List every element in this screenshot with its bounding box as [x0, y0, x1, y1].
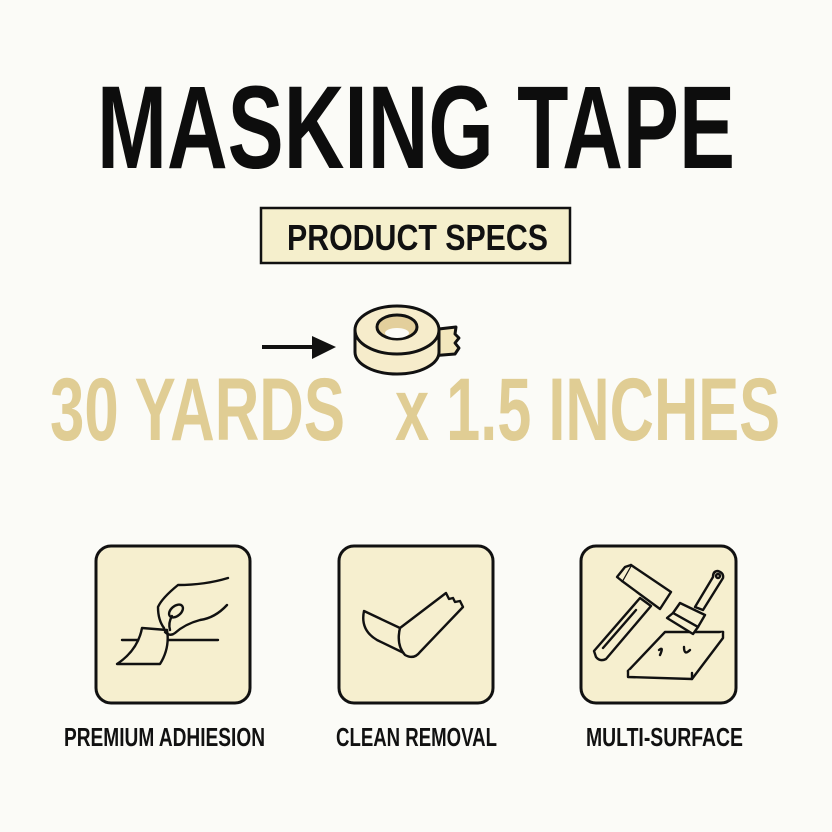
label: multi-surface: MULTI-SURFACE	[586, 722, 743, 752]
icon: hammer, brush, board	[594, 565, 723, 679]
icon: peeling tape	[363, 593, 463, 657]
label: clean removal: CLEAN REMOVAL	[336, 722, 497, 752]
label: premium adhesion: PREMIUM ADHIESION	[64, 722, 265, 752]
subtitle badge: product specs: PRODUCT SPECS	[287, 217, 548, 258]
icon: hand applying tape	[117, 578, 228, 664]
subtitle badge: product specs	[261, 208, 570, 263]
arrow	[262, 336, 336, 359]
panel: multi-surface	[581, 546, 736, 703]
dimensions text: 30 YARDS	[50, 359, 345, 459]
panel: premium adhesion	[96, 546, 250, 703]
icon: tape roll	[355, 306, 459, 374]
dimensions text	[50, 359, 780, 459]
panel: clean removal	[339, 546, 493, 703]
